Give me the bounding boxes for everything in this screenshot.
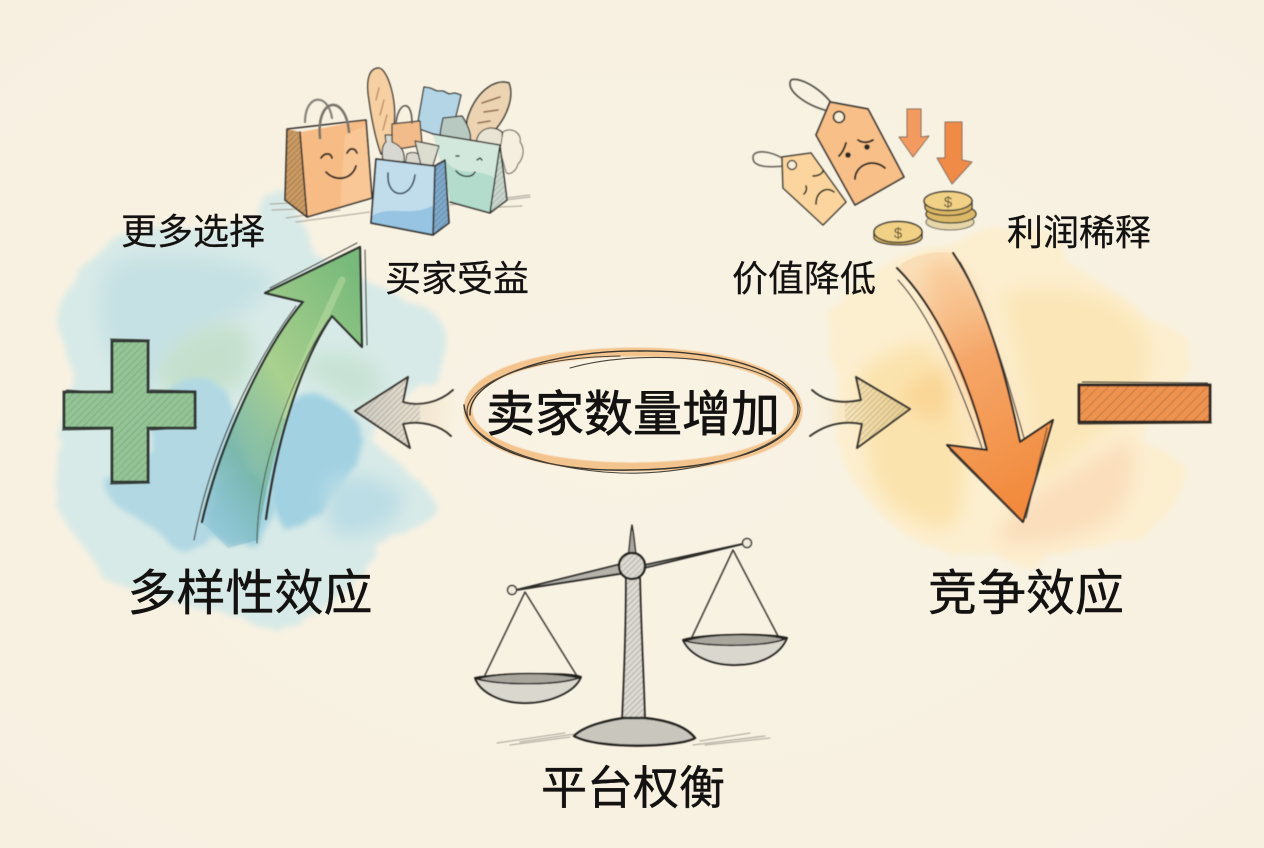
orange small bag and handle: [392, 121, 422, 150]
label: value reduced: 价值降低: [732, 258, 876, 299]
label: more choice: 更多选择: [121, 211, 265, 252]
arrow: pointing left to diversity effect: [355, 377, 460, 448]
cloth puff: [500, 130, 523, 174]
heading: competition effect: 竞争效应: [928, 567, 1124, 621]
green bag: [433, 134, 507, 213]
items in blue bag: [382, 135, 404, 162]
loaf of bread: [466, 82, 511, 141]
smiley on orange bag: [321, 149, 357, 178]
icon: minus sign: [1078, 382, 1212, 424]
small price tag: [753, 152, 846, 225]
ground lines: [497, 733, 770, 745]
icon: plus sign: [62, 339, 197, 484]
heading: diversity effect: 多样性效应: [127, 567, 373, 621]
icon: shopping bags with groceries: [270, 68, 530, 235]
coin stack: $: [944, 194, 953, 211]
smiley on green bag: [456, 156, 482, 176]
label: profit diluted: 利润稀释: [1007, 212, 1151, 253]
arrow: green upward arrow: [194, 243, 367, 548]
icon: balance scale: [475, 525, 787, 746]
icon: sad price tags, down arrows and coins: [753, 79, 976, 245]
heading: platform trade-off: 平台权衡: [541, 762, 725, 814]
scale post: [627, 525, 637, 566]
coin stack: [924, 192, 976, 230]
large down arrow: [937, 122, 972, 184]
orange bag: [285, 100, 372, 217]
central heading: 卖家数量增加: [486, 388, 780, 442]
label: buyers benefit: 买家受益: [385, 258, 529, 299]
blue bag: [371, 159, 449, 235]
coin: [874, 222, 922, 245]
left pan: [475, 592, 581, 703]
arrow: pointing right to competition effect: [810, 377, 910, 448]
watercolor wash: blue and green diversity background: [56, 192, 445, 629]
large price tag: [790, 79, 904, 205]
arrow: orange downward arrow: [897, 252, 1053, 522]
scale beam: [516, 543, 747, 590]
coin: $: [894, 225, 903, 242]
ground shading lines: [270, 195, 530, 222]
center oval: [464, 351, 800, 473]
right pan: [683, 550, 787, 665]
watercolor wash: yellow and orange competition background: [827, 228, 1190, 566]
baguette: [368, 68, 395, 154]
scale base: [574, 718, 695, 746]
green bag contents: [440, 116, 471, 142]
milk packet: [417, 87, 461, 140]
small down arrow: [899, 109, 929, 157]
